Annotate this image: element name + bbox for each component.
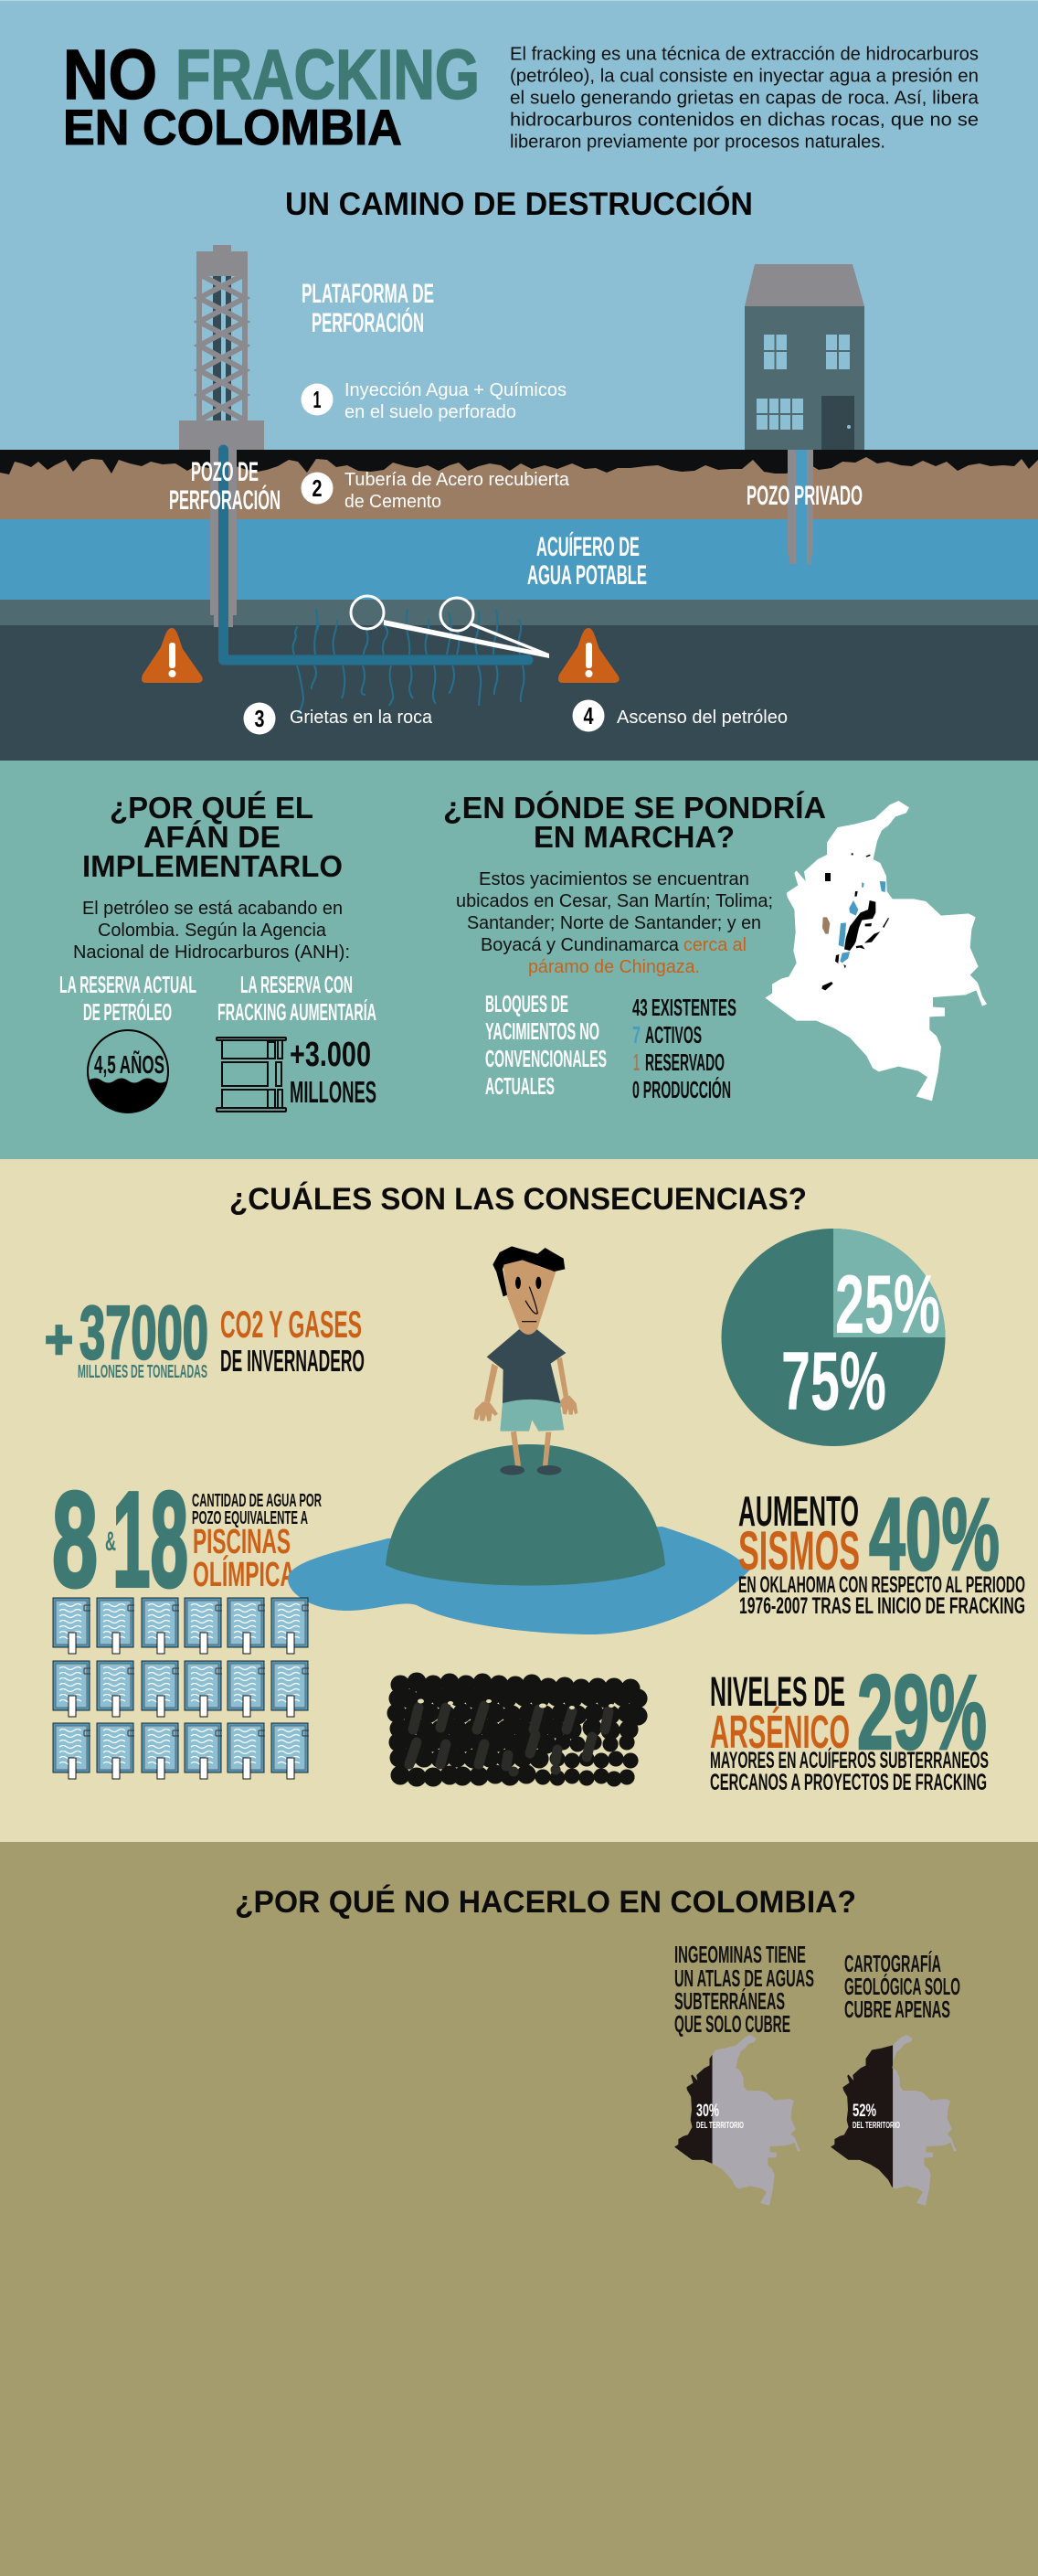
map: 52% coverage: DEL TERRITORIO [853,2121,900,2131]
water blob and olímpica text: 8 [52,1464,98,1615]
icon: shelves barrels [217,1038,286,1112]
label: plataforma de perforación: PLATAFORMA DE [302,279,434,309]
panel: consecuencias [0,1159,1038,1842]
label: bloques [485,990,607,1100]
step 4: Ascenso del petróleo [617,708,788,728]
label: pozo de perforación: POZO DE [191,457,259,487]
map: 30% coverage: DEL TERRITORIO [696,2121,744,2131]
water blob and olímpica text: PISCINAS [193,1523,291,1561]
panel: por qué y dónde [0,761,1038,1159]
heading: consecuencias: ¿CUÁLES SON LAS CONSECUENCIAS? [229,1182,807,1217]
title: EN COLOMBIA [63,99,402,155]
text: yacimientos [456,869,773,977]
label: reserva con fracking: FRACKING AUMENTARÍA [217,998,376,1026]
private well pipe [788,450,813,564]
heading: por qué el afán: ¿POR QUÉ EL [110,791,313,825]
stat: 37000: DE INVERNADERO [220,1344,365,1378]
intro paragraph [510,44,980,152]
stat: arsénico 29%: NIVELES DE [710,1668,845,1715]
water blob and olímpica text: POZO EQUIVALENTE A [192,1508,308,1528]
step 3: Grietas en la roca [290,708,433,728]
stat: arsénico 29%: ARSÉNICO [710,1706,850,1758]
water blob and olímpica text: OLÍMPICA [193,1554,295,1594]
heading: en dónde: EN MARCHA? [534,820,735,854]
step 2: Tubería de Acero recubierta [344,470,570,490]
legend: block counts: 7 [632,1021,641,1048]
stat: +3.000 millones: +3.000 [290,1036,371,1074]
step 1: Inyección Agua + Químicos [344,380,567,400]
text: yacimientos: ubicados en Cesar, San Martín; Tolima; [456,891,773,911]
stat: arsénico 29% [710,1653,989,1795]
stat: sismos 40%: SISMOS [738,1520,860,1581]
label: pozo privado: POZO PRIVADO [747,481,863,511]
illustration: person [473,1246,577,1475]
text: ingeominas: QUE SOLO CUBRE [674,2010,790,2038]
heading: por qué el afán: AFÁN DE [143,820,281,854]
text: cartografía: CUBRE APENAS [844,1996,950,2023]
heading: por qué no hacerlo: ¿POR QUÉ NO HACERLO EN COLOMBIA? [235,1885,856,1920]
step 2: de Cemento [344,492,441,512]
step 3: 3 [254,705,265,732]
text: petróleo se acaba: El petróleo se está acabando en [82,899,343,919]
icon: drilling rig [179,245,264,450]
step 4 [572,700,788,731]
stat: 37000: CO2 Y GASES [220,1303,362,1346]
map: 30% coverage: 30% [696,2102,719,2121]
text: ingeominas [674,1941,814,2038]
text: yacimientos: Estos yacimientos se encuentran [479,869,749,889]
icon: warning right [558,628,620,683]
text: ingeominas: UN ATLAS DE AGUAS [674,1964,814,1992]
drilling well pipe [210,450,528,660]
label: acuífero [527,531,647,591]
chart: pie 25/75 [722,1229,945,1446]
stat: sismos 40% [738,1477,1025,1619]
intro paragraph: hidrocarburos contenidos en dichas rocas, que no se [510,110,979,130]
legend: block counts: 0 PRODUCCIÓN [632,1076,731,1103]
text: petróleo se acaba [73,899,350,963]
intro paragraph: (petróleo), la cual consiste en inyectar agua a presión en [510,66,979,86]
icon: warning left [142,628,203,683]
label: pozo de perforación: PERFORACIÓN [169,484,281,516]
stat: 37000 [45,1290,365,1382]
stat: 37000: + [45,1309,73,1370]
text: yacimientos: páramo de Chingaza. [528,957,700,977]
legend: block counts: 1 [633,1048,640,1076]
step 1: 1 [312,386,322,413]
map: Colombia blocks [765,801,987,1101]
pools grid [53,1598,309,1779]
label: bloques: CONVENCIONALES [485,1045,607,1072]
heading: un camino de destrucción: UN CAMINO DE DESTRUCCIÓN [285,186,753,222]
water blob and olímpica text [52,1464,750,1634]
text: ingeominas: SUBTERRÁNEAS [674,1987,785,2015]
legend: block counts: 43 EXISTENTES [632,994,736,1021]
icon: 4,5 años circle [88,1030,168,1112]
text: ingeominas: INGEOMINAS TIENE [674,1941,806,1968]
stat: sismos 40%: AUMENTO [738,1487,859,1535]
illustration: arsenic oil drops [397,1682,638,1779]
legend: block counts: RESERVADO [645,1048,725,1076]
title [63,36,480,155]
panel: por qué no hacerlo [236,1885,959,2206]
label: reserva actual [59,971,196,1026]
text: yacimientos: Santander; Norte de Santander; y en [467,913,761,933]
intro paragraph: el suelo generando grietas en capas de roca. Así, libera [510,88,980,108]
map: 52% coverage [831,2035,957,2206]
label: pozo de perforación [169,457,281,516]
text: yacimientos: Boyacá y Cundinamarca [481,935,680,955]
legend: block counts: ACTIVOS [645,1021,702,1048]
label: plataforma de perforación [302,279,434,338]
intro paragraph: El fracking es una técnica de extracción de hidrocarburos [510,44,979,64]
hill island [386,1444,665,1585]
label: plataforma de perforación: PERFORACIÓN [312,307,424,338]
heading: por qué el afán [82,791,343,883]
label: reserva con fracking [217,971,376,1026]
step 2 [302,470,570,512]
chart: pie 25/75: 25% [835,1259,940,1351]
step 3 [243,702,433,735]
text: petróleo se acaba: Nacional de Hidrocarburos (ANH): [73,942,350,963]
intro paragraph: liberaron previamente por procesos naturales. [510,132,885,152]
label: bloques: ACTUALES [485,1072,555,1100]
icon: 4,5 años circle: 4,5 AÑOS [94,1050,164,1079]
text: petróleo se acaba: Colombia. Según la Agencia [98,921,327,941]
text: yacimientos: cerca al [683,935,747,955]
label: acuífero: AGUA POTABLE [527,560,647,591]
fracture cracks [292,610,524,715]
water blob and olímpica text: CANTIDAD DE AGUA POR [192,1491,322,1511]
label: reserva con fracking: LA RESERVA CON [240,971,353,998]
text: cartografía: CARTOGRAFÍA [844,1950,941,1977]
step 2: 2 [312,474,322,502]
magnifier circles [351,596,549,658]
panel: fracking process diagram [0,0,1038,451]
water blob and olímpica text: & [105,1527,116,1557]
label: reserva actual: LA RESERVA ACTUAL [59,971,196,998]
label: bloques: BLOQUES DE [485,990,568,1017]
chart: pie 25/75: 75% [781,1336,886,1428]
heading: en dónde [443,791,826,854]
legend: block counts [632,994,736,1103]
stat: 37000: MILLONES DE TONELADAS [78,1362,207,1382]
label: reserva actual: DE PETRÓLEO [83,998,172,1026]
title: FRACKING [175,36,480,114]
heading: por qué el afán: IMPLEMENTARLO [82,849,343,883]
water blob and olímpica text: 18 [112,1464,188,1615]
panel: underground layers [0,450,1038,761]
label: acuífero: ACUÍFERO DE [536,531,640,562]
stat: +3.000 millones [290,1036,376,1109]
heading: en dónde: ¿EN DÓNDE SE PONDRÍA [443,791,826,825]
stat: 37000: 37000 [79,1290,208,1375]
step 4: 4 [583,702,594,729]
text: cartografía [844,1950,960,2023]
map: 30% coverage [674,2035,800,2206]
stat: +3.000 millones: MILLONES [290,1075,376,1109]
step 1 [302,380,567,422]
label: bloques: YACIMIENTOS NO [485,1017,599,1045]
step 1: en el suelo perforado [344,402,516,422]
icon: house [745,264,864,451]
map: 52% coverage: 52% [853,2102,876,2121]
title: NO [63,36,157,114]
